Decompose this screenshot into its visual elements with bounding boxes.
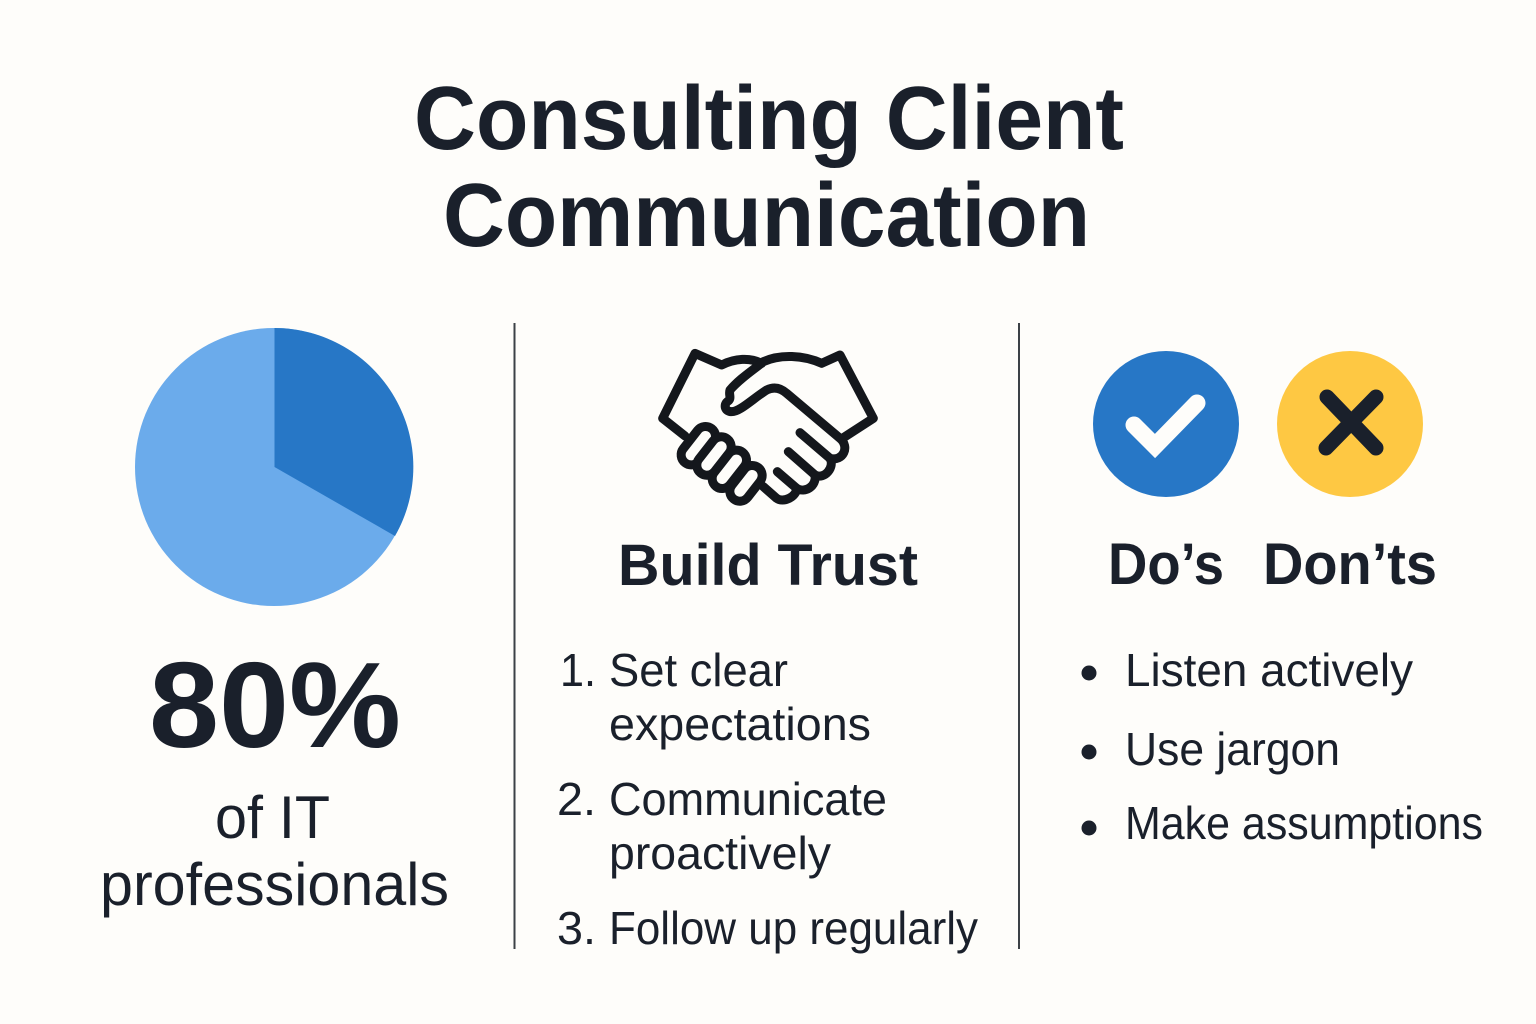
heading: don'ts: Don’ts [1263,532,1437,597]
title [414,69,1124,266]
numbered list: Communicate [609,773,887,825]
statistic label: professionals [100,851,449,918]
bullet list: Listen actively [1125,644,1413,696]
icon: cross [1277,351,1423,497]
numbered list: 2. [557,773,596,825]
pie chart [135,328,413,606]
heading: build trust: Build Trust [618,533,918,598]
numbered list: Set clear [609,644,788,696]
statistic label: of IT [215,784,330,851]
statistic label [100,784,449,918]
numbered list: expectations [609,698,871,750]
numbered list: 3. [557,902,596,954]
heading: do's: Do’s [1108,532,1224,597]
title: Communication [443,166,1090,266]
numbered list: 1. [560,644,596,696]
panel: build trust [557,353,978,954]
title: Consulting Client [414,69,1124,169]
panel: statistic [100,328,449,918]
numbered list: proactively [609,827,831,879]
bullet list: Make assumptions [1125,797,1483,849]
icon: check [1093,351,1239,497]
numbered list [557,644,978,954]
panel: dos and don'ts [1082,351,1483,849]
bullet list [1082,644,1483,849]
icon: handshake [663,353,873,505]
bullet list: Use jargon [1125,723,1340,775]
numbered list: Follow up regularly [609,902,978,954]
statistic value: 80% [149,637,401,773]
